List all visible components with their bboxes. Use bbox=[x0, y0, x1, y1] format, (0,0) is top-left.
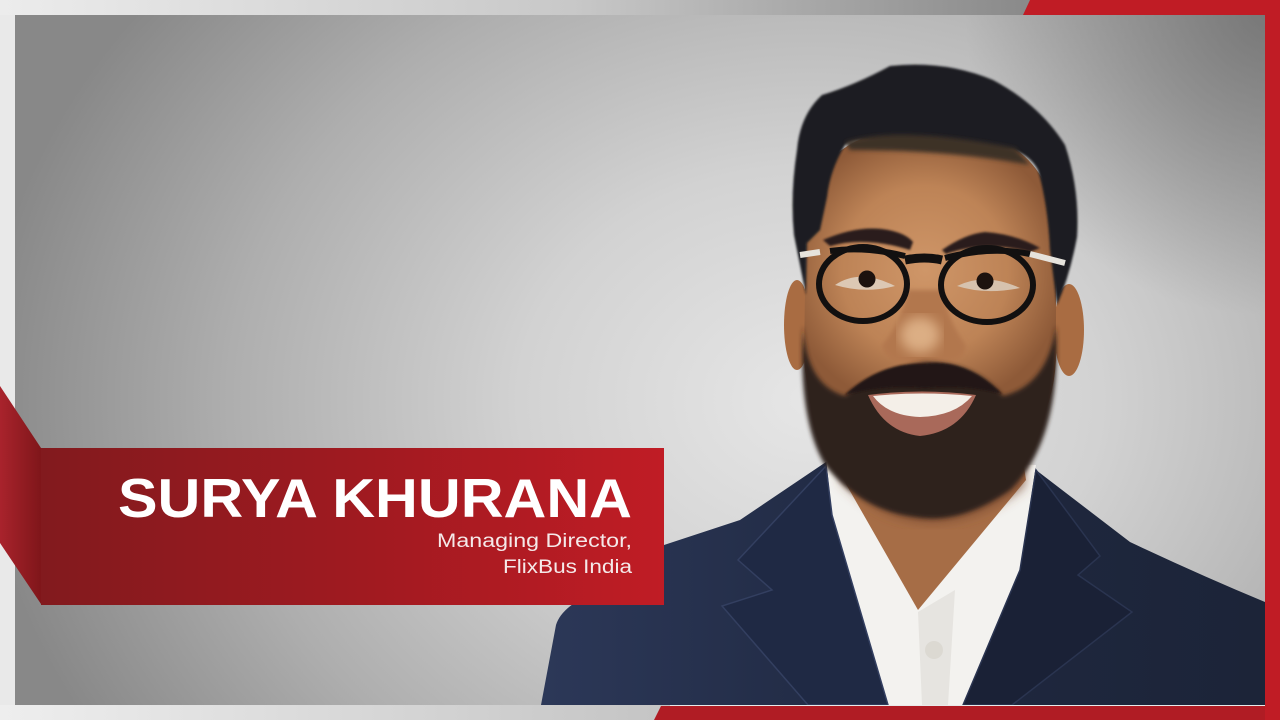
beard bbox=[802, 325, 1057, 518]
face bbox=[804, 139, 1056, 398]
shirt bbox=[826, 458, 1036, 705]
job title: Managing Director, bbox=[437, 531, 632, 552]
banner fold bbox=[0, 386, 41, 604]
red frame accents bbox=[654, 0, 1280, 720]
portrait photo bbox=[541, 65, 1265, 705]
ears bbox=[784, 280, 1084, 376]
mustache bbox=[845, 363, 1002, 395]
lapels bbox=[722, 466, 1132, 705]
eyebrows bbox=[823, 228, 1040, 254]
hair hairline bbox=[845, 135, 1030, 165]
hair bbox=[793, 65, 1078, 305]
company: FlixBus India bbox=[503, 557, 632, 578]
name banner bbox=[41, 448, 664, 605]
name: SURYA KHURANA bbox=[118, 467, 632, 529]
jacket bbox=[541, 462, 1265, 705]
neck bbox=[838, 440, 1026, 610]
eyes bbox=[835, 270, 1020, 291]
glasses bbox=[800, 247, 1065, 322]
mouth bbox=[868, 392, 976, 436]
nose bbox=[884, 289, 964, 359]
